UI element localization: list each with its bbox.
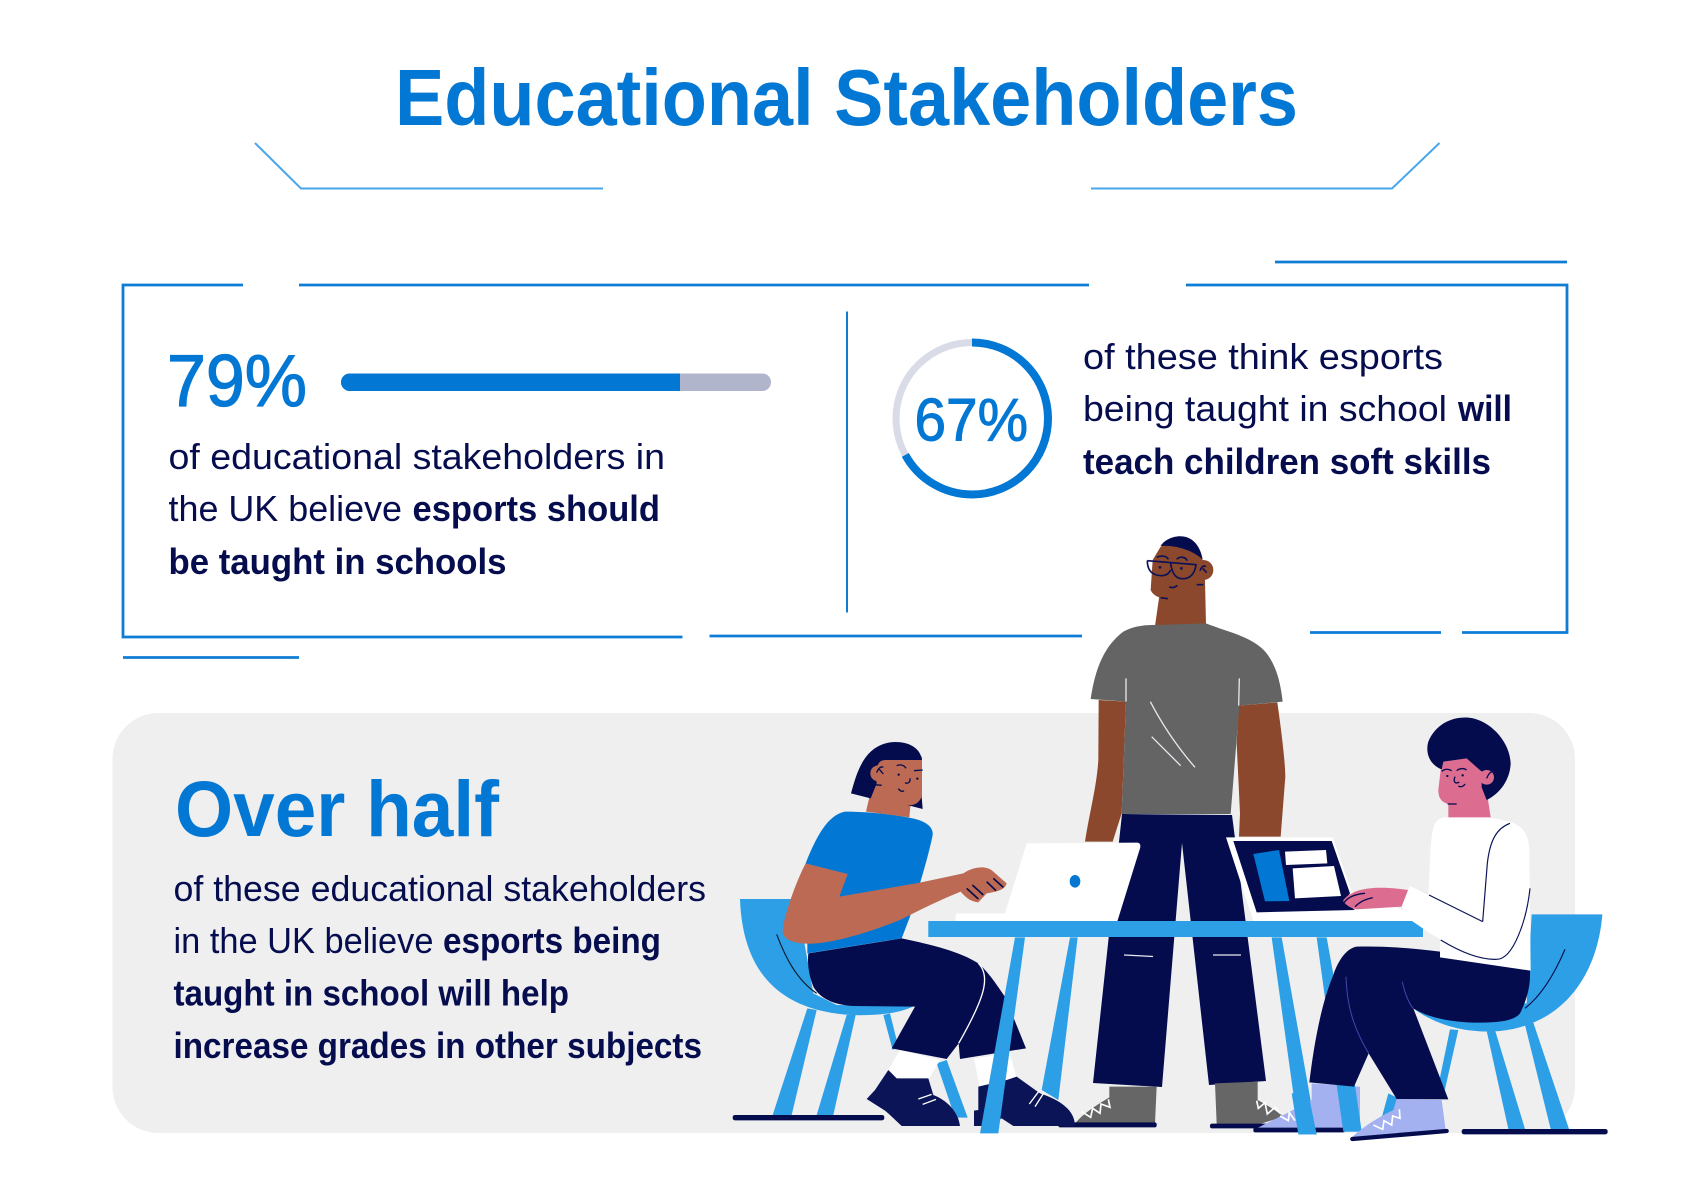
text: increase grades: taught in school will help xyxy=(174,972,569,1014)
shoes xyxy=(867,1070,960,1126)
trousers xyxy=(808,938,1026,1059)
stat: 79 percent: 79% xyxy=(167,341,307,422)
heading: over half: Over half xyxy=(175,764,500,853)
donut chart xyxy=(896,342,1048,494)
hand xyxy=(1343,888,1408,909)
sweater xyxy=(1402,817,1531,971)
hair xyxy=(851,742,922,798)
table xyxy=(980,937,1362,1134)
text: soft skills xyxy=(1083,336,1512,482)
laptop: open screen xyxy=(1226,837,1413,921)
stat: 79 percent xyxy=(167,341,771,582)
text: soft skills: of these think esports xyxy=(1083,336,1443,377)
shirt xyxy=(806,812,933,953)
trousers xyxy=(1093,814,1266,1087)
panel: over half xyxy=(112,713,1575,1133)
stat: 67 percent: 67% xyxy=(914,386,1028,454)
figure: standing man xyxy=(1058,536,1293,1128)
illustration: people at table xyxy=(733,536,1608,1139)
shoes xyxy=(1257,1083,1343,1128)
text: esports should be taught xyxy=(168,436,665,582)
progress bar xyxy=(341,374,771,391)
table top xyxy=(928,921,1423,937)
stat: 67 percent xyxy=(896,336,1512,494)
text: increase grades: of these educational stakeholders xyxy=(174,868,706,909)
laptop: back of screen xyxy=(955,843,1140,921)
text: increase grades xyxy=(174,868,706,1066)
text: esports should be taught: esports should xyxy=(412,488,660,529)
chair xyxy=(740,899,1078,1118)
socks xyxy=(888,1050,1017,1088)
title bracket decoration xyxy=(255,143,1440,188)
neck and head xyxy=(1448,787,1491,819)
text: increase grades: in the UK believe xyxy=(174,920,434,961)
text: esports should be taught: be taught in schools xyxy=(168,541,506,582)
torso and head xyxy=(1085,536,1285,842)
chair xyxy=(1378,914,1602,1130)
text: increase grades: increase grades in other subjects xyxy=(174,1025,702,1066)
panel: stats frame xyxy=(123,262,1567,658)
text: soft skills: being taught in school xyxy=(1083,388,1447,429)
figure: seated man xyxy=(1226,718,1608,1139)
trousers xyxy=(1309,947,1530,1099)
text: soft skills: will xyxy=(1457,388,1512,429)
text: increase grades: esports being xyxy=(443,920,661,961)
neck and face xyxy=(866,780,911,817)
arm xyxy=(783,863,1007,944)
text: soft skills: teach children soft skills xyxy=(1083,441,1491,482)
text: esports should be taught: of educational stakeholders in xyxy=(168,436,665,477)
text: esports should be taught: the UK believe xyxy=(168,488,402,529)
title: Educational Stakeholders xyxy=(395,53,1298,142)
shoes xyxy=(1058,1087,1157,1127)
figure: seated woman xyxy=(733,742,1078,1126)
